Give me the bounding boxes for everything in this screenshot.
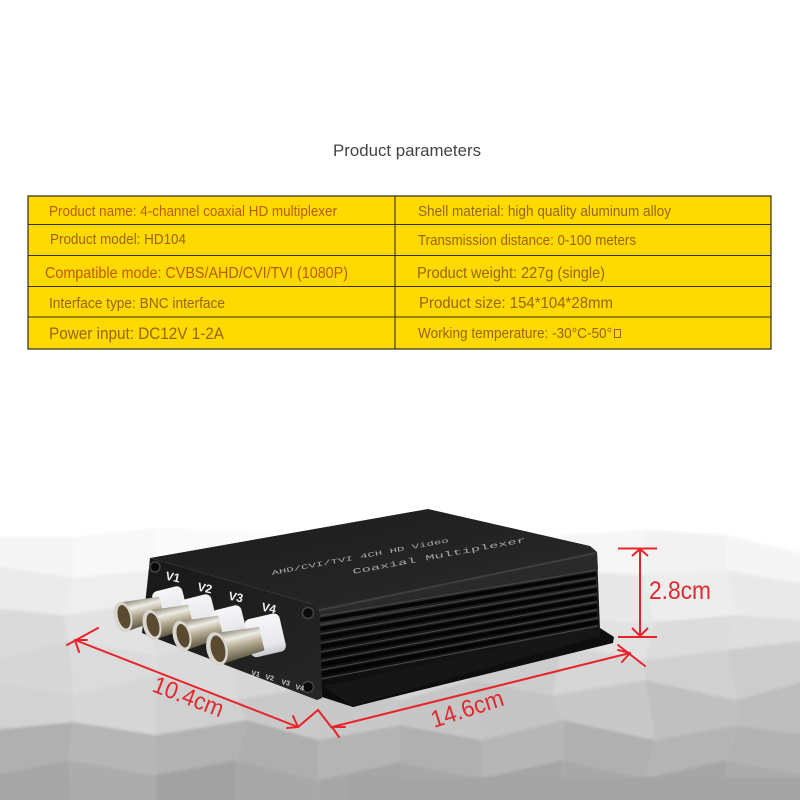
LED labels: V4 [295, 684, 305, 693]
top face [150, 509, 597, 610]
dimension: length 14.6cm [332, 645, 645, 737]
channel labels: V3 [227, 589, 245, 606]
table background [28, 196, 771, 349]
table text: right column: Product size: 154*104*28mm [419, 295, 613, 312]
table text: left column: Power input: DC12V 1-2A [49, 325, 224, 343]
dimension: width 10.4cm: 10.4cm [149, 671, 228, 723]
BNC connector V2 [139, 593, 218, 642]
table text: left column: Compatible mode: CVBS/AHD/CVI/TVI (1080P) [45, 265, 348, 282]
table text: left column: Interface type: BNC interface [49, 295, 225, 312]
LED labels: V1 [251, 670, 261, 679]
LED labels: V3 [281, 679, 291, 688]
dimension: height 2.8cm [618, 548, 711, 637]
top panel printed text: Coaxial Multiplexer [352, 537, 527, 577]
channel labels: V1 [164, 569, 182, 586]
dimension: height 2.8cm: 2.8cm [649, 577, 711, 605]
side face with ridges [316, 552, 600, 707]
title: Product parameters [333, 142, 481, 160]
dimension: zigzag corner joint [298, 710, 332, 728]
product: coaxial multiplexer box [110, 509, 614, 707]
background: low-poly grey terrain [0, 528, 800, 800]
table text: right column: Transmission distance: 0-100 meters [418, 232, 636, 249]
dimension: width 10.4cm [67, 628, 298, 728]
table text: left column [45, 203, 348, 343]
screws [150, 562, 314, 692]
front panel [142, 558, 322, 700]
table text: left column: Product model: HD104 [50, 231, 186, 248]
channel labels [164, 569, 278, 617]
table text: right column: Shell material: high quality aluminum alloy [418, 203, 671, 220]
channel labels: V4 [260, 600, 278, 617]
BNC connector V4 [202, 612, 287, 668]
parameter table [28, 196, 771, 349]
top panel printed text [271, 537, 527, 577]
LED labels [251, 670, 305, 693]
table text: left column: Product name: 4-channel coaxial HD multiplexer [49, 203, 337, 220]
LED labels: V2 [265, 674, 275, 683]
BNC connector V1 [110, 585, 189, 634]
top panel printed text: AHD/CVI/TVI 4CH HD Video [271, 537, 450, 577]
table text: right column: Product weight: 227g (single) [417, 265, 605, 282]
dimension: length 14.6cm: 14.6cm [428, 685, 507, 734]
table text: right column [417, 203, 671, 342]
mounting flange [340, 628, 614, 707]
table text: right column: Working temperature: -30°C-50° [418, 325, 612, 342]
BNC connector V3 [169, 604, 248, 653]
channel labels: V2 [196, 580, 214, 597]
